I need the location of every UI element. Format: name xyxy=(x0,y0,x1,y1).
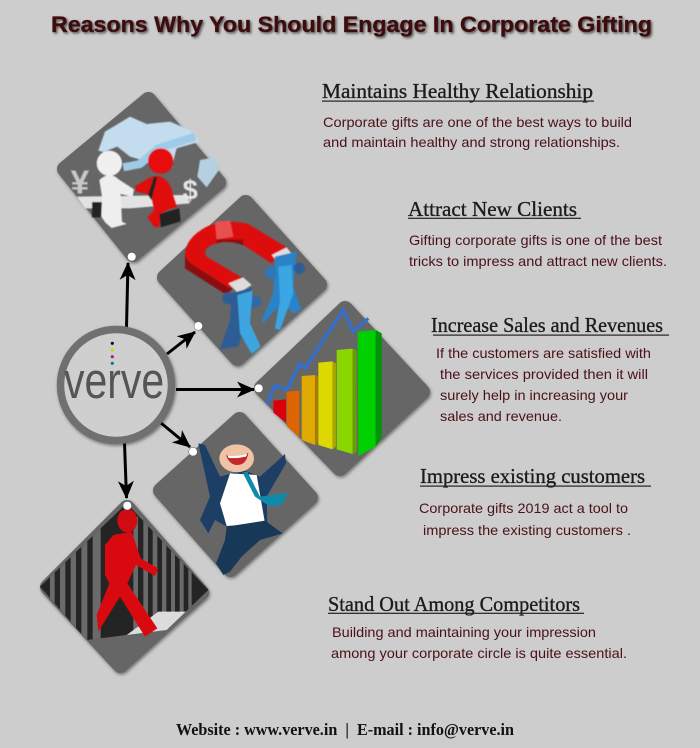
arrow: logo to figure xyxy=(124,443,126,498)
panel: sales growth chart diamond xyxy=(262,309,422,468)
text block: maintains healthy relationship xyxy=(322,79,632,150)
panel: stand out figure diamond xyxy=(40,503,208,665)
text block: stand out among competitors: Building and maintaining your impression xyxy=(332,624,596,640)
text block: attract new clients: tricks to impress and attract new clients. xyxy=(409,253,667,269)
text block: increase sales and revenues: the services provided then it will xyxy=(440,366,648,382)
text block: maintains healthy relationship: Corporate gifts are one of the best ways to build xyxy=(323,114,632,130)
arrow: logo to chart xyxy=(176,388,254,391)
text block: increase sales and revenues: Increase Sales and Revenues xyxy=(431,313,663,337)
text block: attract new clients xyxy=(408,197,667,269)
arrow: logo to customer xyxy=(161,423,190,447)
text block: increase sales and revenues: surely help in increasing your xyxy=(440,387,628,403)
text block: stand out among competitors: among your corporate circle is quite essential. xyxy=(331,645,627,661)
title: Reasons Why You Should Engage In Corporate Gifting xyxy=(51,12,652,37)
text block: maintains healthy relationship: Maintains Healthy Relationship xyxy=(322,79,593,103)
text block: increase sales and revenues: sales and revenue. xyxy=(440,408,562,424)
footer: contact details: Website : www.verve.in | E-mail : info@verve.in xyxy=(176,720,514,739)
panel: happy customer diamond xyxy=(161,420,310,575)
text block: attract new clients: Attract New Clients xyxy=(408,197,577,221)
panel: handshake diamond: ¥ xyxy=(71,164,90,201)
text block: stand out among competitors xyxy=(328,592,627,661)
text block: attract new clients: Gifting corporate gifts is one of the best xyxy=(409,232,662,248)
logo: verve xyxy=(60,330,172,440)
text block: increase sales and revenues: If the customers are satisfied with xyxy=(436,345,651,361)
text block: impress existing customers: Impress existing customers xyxy=(420,464,645,488)
text block: increase sales and revenues xyxy=(431,313,669,424)
logo: verve: verve xyxy=(64,352,164,409)
arrow: logo to handshake xyxy=(126,263,128,327)
text block: impress existing customers: Corporate gifts 2019 act a tool to xyxy=(419,500,628,516)
text block: maintains healthy relationship: and maintain healthy and strong relationships. xyxy=(323,134,620,150)
text block: stand out among competitors: Stand Out Among Competitors xyxy=(328,592,580,616)
panel: handshake diamond xyxy=(65,100,219,254)
text block: impress existing customers xyxy=(419,464,651,538)
panel: handshake diamond: $ xyxy=(183,174,198,205)
panel: magnet diamond xyxy=(165,203,319,358)
arrow: logo to magnet xyxy=(167,332,195,354)
connector dots xyxy=(123,252,263,510)
text block: impress existing customers: impress the existing customers . xyxy=(423,522,631,538)
